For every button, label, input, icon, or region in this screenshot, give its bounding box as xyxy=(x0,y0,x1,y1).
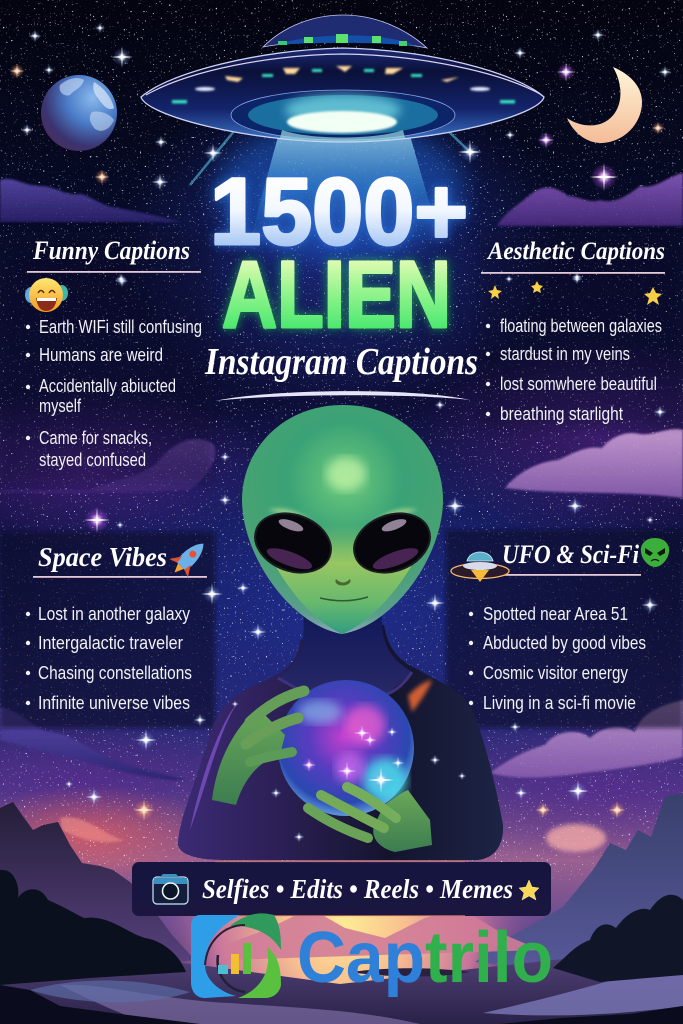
icon: angry alien emoji xyxy=(641,538,669,567)
icon: gold star xyxy=(519,880,539,900)
icon: small UFO xyxy=(451,552,509,582)
saucer disc xyxy=(141,48,544,142)
neck xyxy=(278,612,412,715)
nose xyxy=(335,579,350,586)
alien character xyxy=(178,405,503,860)
left eye xyxy=(247,503,339,583)
caption list: Humans are weird xyxy=(39,345,163,365)
subtitle underline xyxy=(215,391,470,401)
caption list: Chasing constellations xyxy=(38,663,192,683)
caption list: Cosmic visitor energy xyxy=(483,663,628,683)
caption list: Came for snacks, xyxy=(39,428,152,448)
hoodie stars xyxy=(231,700,466,842)
lower face shading xyxy=(262,525,425,634)
scattered bright stars xyxy=(9,22,672,821)
caption list xyxy=(469,604,646,713)
purple clouds xyxy=(0,173,683,852)
logo: Captrilo xyxy=(191,913,553,998)
heading: Aesthetic Captions xyxy=(486,238,665,265)
UFO xyxy=(141,15,544,260)
dome xyxy=(263,15,427,48)
saucer rim xyxy=(146,54,540,95)
glowing orb xyxy=(278,680,432,816)
logo mark xyxy=(191,913,281,998)
caption list: myself xyxy=(39,396,82,416)
caption list: Infinite universe vibes xyxy=(38,693,190,713)
forehead glow xyxy=(326,457,366,491)
underside ring and light xyxy=(231,90,455,142)
right hand xyxy=(308,787,432,852)
caption list: Lost in another galaxy xyxy=(38,604,190,624)
tractor beam xyxy=(190,118,482,260)
tagline text: Selfies • Edits • Reels • Memes xyxy=(202,874,513,904)
panel: UFO and sci-fi xyxy=(451,538,669,713)
panel: space vibes xyxy=(26,534,213,713)
left hand xyxy=(212,691,304,805)
caption list: Accidentally abiucted xyxy=(39,376,176,396)
icon: laughing emoji xyxy=(25,278,68,312)
caption list: Earth WIFi still confusing xyxy=(39,317,202,337)
icon: crescent moon xyxy=(567,67,642,143)
caption list: stayed confused xyxy=(39,450,146,470)
hoodie xyxy=(178,625,503,860)
panel: funny captions xyxy=(25,236,202,470)
caption list: Intergalactic traveler xyxy=(38,633,183,653)
caption list: Abducted by good vibes xyxy=(483,633,646,653)
mouth xyxy=(320,597,368,601)
caption list xyxy=(26,317,202,470)
dark panels behind captions xyxy=(0,232,683,728)
subtitle: Instagram Captions: Instagram Captions xyxy=(204,341,478,383)
icon: rocket xyxy=(165,534,213,582)
title: 1500+: 1500+ xyxy=(210,159,468,265)
icon: camera xyxy=(153,874,188,904)
head xyxy=(242,405,443,634)
heading: UFO & Sci-Fi xyxy=(502,540,640,569)
right eye xyxy=(346,503,438,583)
icon: gold stars xyxy=(488,281,662,305)
caption list: Living in a sci-fi movie xyxy=(483,693,636,713)
heading: Space Vibes xyxy=(38,542,167,572)
heading: Funny Captions xyxy=(32,236,190,265)
icon: planet xyxy=(41,75,117,151)
left sleeve highlight xyxy=(190,700,240,830)
caption list xyxy=(486,316,662,424)
panel: aesthetic captions xyxy=(481,238,665,424)
logo wordmark: Captrilo xyxy=(297,918,553,998)
title: ALIEN: ALIEN xyxy=(222,242,451,348)
saucer lights xyxy=(172,66,515,104)
caption list: Spotted near Area 51 xyxy=(483,604,628,624)
sunset mountains and ground xyxy=(0,793,683,1024)
caption list: stardust in my veins xyxy=(500,344,630,364)
caption list: breathing starlight xyxy=(500,404,623,424)
caption list xyxy=(26,604,192,713)
hood folds xyxy=(278,672,412,696)
brow ridges xyxy=(268,508,418,558)
tagline bar xyxy=(132,861,551,916)
